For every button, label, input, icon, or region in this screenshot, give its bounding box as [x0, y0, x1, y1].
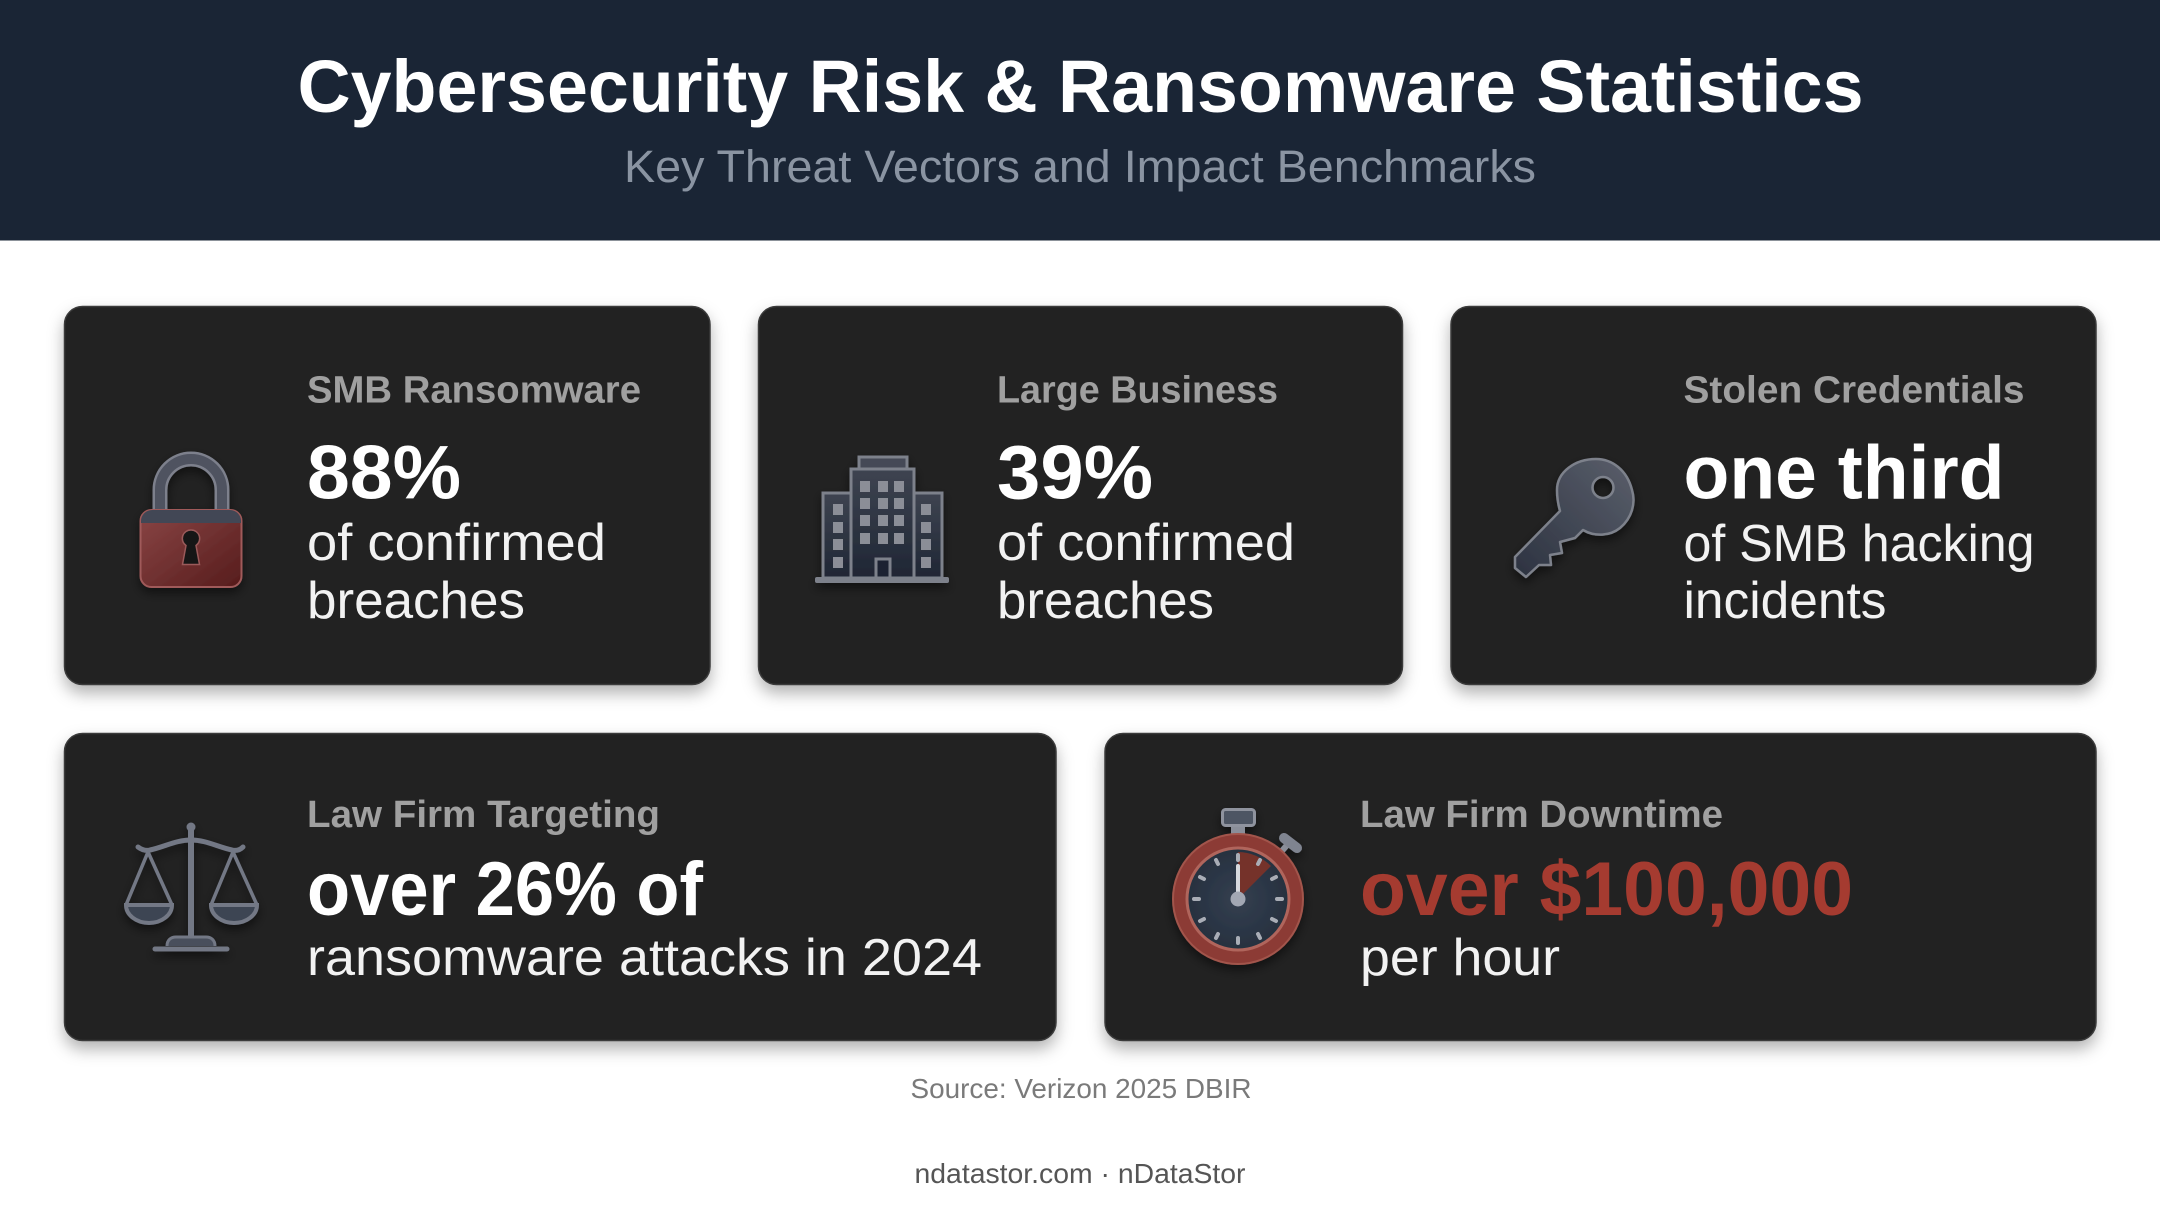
label: Law Firm Targeting: [307, 794, 660, 836]
icon: office building: [815, 457, 949, 583]
description: breaches: [997, 572, 1214, 630]
panel: SMB Ransomware: [64, 306, 710, 684]
description: of SMB hacking: [1684, 515, 2034, 573]
panel: Large Business: [758, 306, 1402, 684]
statistic: over 26% of: [307, 847, 704, 932]
label: Stolen Credentials: [1684, 370, 2024, 412]
subtitle: Key Threat Vectors and Impact Benchmarks: [624, 141, 1536, 192]
description: per hour: [1360, 929, 1560, 987]
icon: stopwatch: [1173, 810, 1303, 964]
header banner: [0, 0, 2160, 240]
footer branding: ndatastor.com · nDataStor: [914, 1158, 1246, 1189]
panel: Stolen Credentials: [1451, 306, 2096, 684]
panel: Law Firm Targeting: [64, 734, 1056, 1040]
statistic: one third: [1684, 430, 2004, 516]
statistic: 88%: [307, 430, 461, 516]
label: SMB Ransomware: [307, 370, 641, 412]
label: Large Business: [997, 370, 1278, 412]
description: of confirmed: [997, 514, 1295, 572]
description: incidents: [1684, 572, 1886, 630]
description: breaches: [307, 572, 525, 630]
icon: scales of justice: [126, 822, 257, 949]
description: of confirmed: [307, 514, 606, 572]
icon: key: [1515, 459, 1634, 577]
source note: Source: Verizon 2025 DBIR: [910, 1073, 1252, 1104]
label: Law Firm Downtime: [1360, 794, 1723, 836]
statistic: over $100,000: [1360, 847, 1853, 932]
title: Cybersecurity Risk & Ransomware Statistics: [298, 45, 1864, 128]
description: ransomware attacks in 2024: [307, 929, 982, 987]
icon: padlock: [140, 459, 242, 587]
panel: Law Firm Downtime: [1105, 734, 2096, 1040]
statistic: 39%: [997, 430, 1153, 516]
